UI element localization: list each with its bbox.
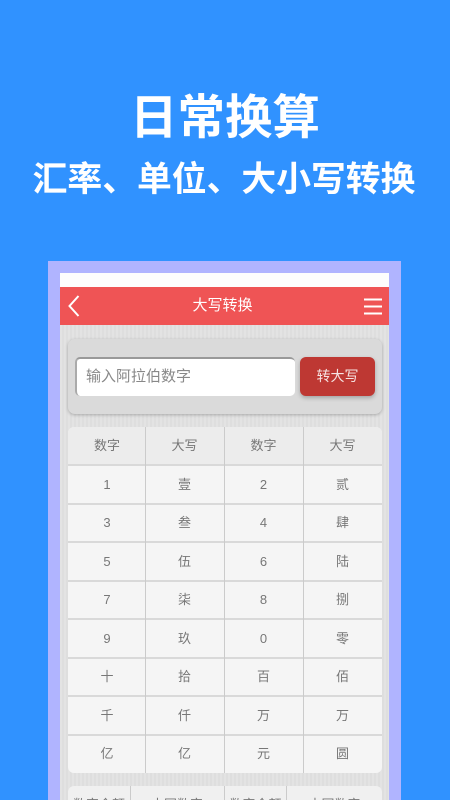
- table rows: 7: [103, 592, 111, 607]
- table rows: 2: [260, 476, 267, 492]
- table rows: 6: [260, 554, 267, 568]
- table rows: 百: [257, 669, 270, 684]
- table rows: 元: [257, 746, 270, 761]
- table rows: 玖: [178, 630, 191, 646]
- table rows: 壹: [178, 476, 191, 492]
- table rows: 1: [103, 476, 111, 492]
- table rows: 3: [103, 515, 111, 530]
- table rows: 柒: [178, 592, 191, 607]
- input card: [68, 339, 382, 414]
- table rows: 十: [100, 669, 114, 684]
- app header bar: [60, 287, 389, 325]
- table rows: 拾: [178, 669, 191, 684]
- convert button: 转大写: [316, 368, 358, 384]
- header title: 大写转换: [192, 297, 252, 314]
- table rows: [100, 476, 349, 761]
- table rows: 9: [103, 630, 111, 646]
- table rows: 亿: [178, 746, 191, 761]
- table rows: 0: [260, 630, 267, 646]
- app screen: [60, 273, 389, 800]
- table rows: 仟: [178, 708, 191, 722]
- number input: 输入阿拉伯数字: [86, 368, 191, 385]
- table rows: 圆: [336, 746, 349, 761]
- table rows: 叁: [178, 515, 191, 530]
- icon: menu: [364, 298, 382, 314]
- table rows: 陆: [336, 554, 349, 568]
- table rows: 万: [257, 708, 270, 722]
- table rows: 零: [336, 630, 349, 646]
- table header row: 大写: [171, 438, 198, 453]
- table rows: 8: [260, 592, 267, 607]
- table rows: 伍: [178, 554, 191, 568]
- table rows: 佰: [336, 669, 349, 684]
- icon: back arrow: [68, 295, 80, 317]
- convert button: [300, 357, 375, 396]
- table rows: 亿: [100, 746, 114, 761]
- table rows: 4: [260, 515, 267, 530]
- table rows: 万: [336, 708, 349, 722]
- table header row: 数字: [94, 438, 120, 453]
- phone frame: [48, 261, 401, 800]
- number input: [75, 357, 295, 396]
- table header row: 大写: [329, 438, 356, 453]
- conversion table: [68, 427, 382, 773]
- table header row: [68, 427, 382, 465]
- table rows: 肆: [336, 515, 349, 530]
- table rows: 捌: [336, 592, 349, 607]
- table rows: 贰: [336, 476, 349, 492]
- status bar: [60, 273, 389, 287]
- second table, cut off at the bottom edge: [68, 786, 382, 800]
- table rows: 千: [100, 708, 114, 722]
- title: 日常换算: [130, 92, 320, 145]
- table rows: 5: [103, 554, 111, 568]
- table header row: 数字: [250, 438, 276, 453]
- subtitle: 汇率、单位、大小写转换: [33, 160, 415, 199]
